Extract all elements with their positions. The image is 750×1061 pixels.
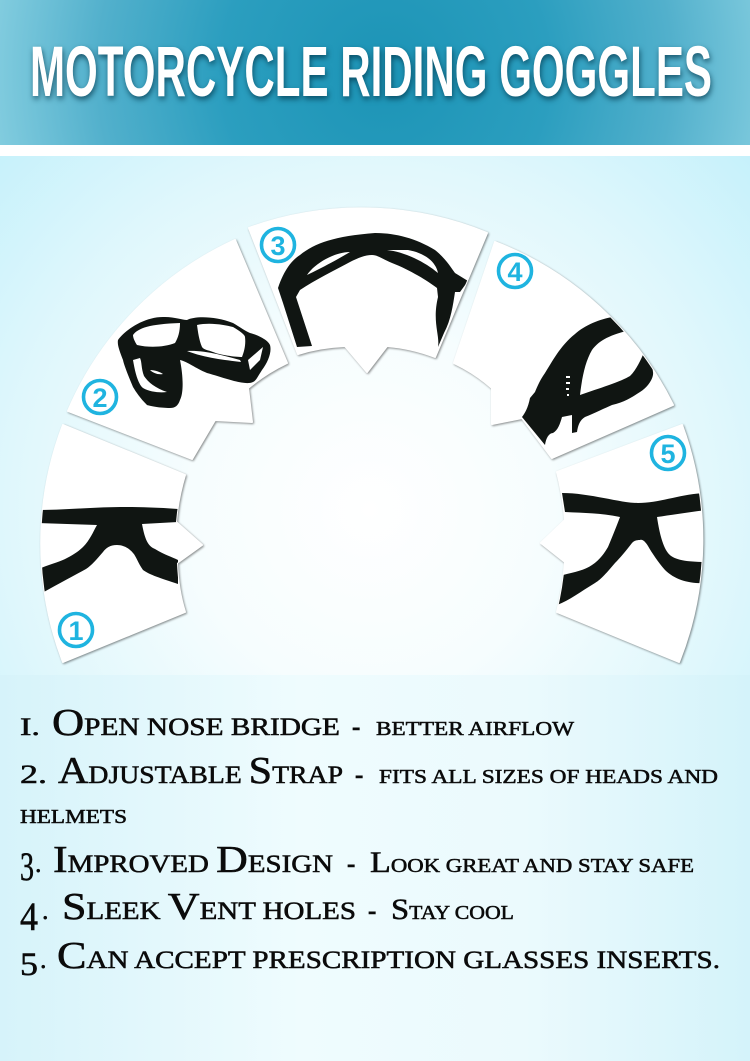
- item 4: sleek vent holes: SLEEK VENT HOLES: [62, 886, 356, 928]
- item 1: open nose bridge: I.: [20, 714, 40, 741]
- icon: number 5: [652, 436, 684, 470]
- goggles: three quarter view with strap: [118, 317, 271, 408]
- item 1: open nose bridge: -: [352, 714, 360, 741]
- feature list: [20, 702, 720, 983]
- panel: wedge 3 improved design: [249, 208, 487, 372]
- item 4: sleek vent holes: -: [368, 898, 376, 925]
- item 2: adjustable strap: -: [355, 762, 363, 789]
- icon: number 3: [262, 228, 294, 262]
- item 4: sleek vent holes: .: [42, 896, 48, 925]
- icon: number 2: 2: [92, 383, 108, 413]
- goggles: top view with strap: [278, 233, 468, 347]
- item 2: adjustable strap: [20, 750, 718, 828]
- item 3: improved design: [20, 839, 694, 889]
- item 5: prescription inserts: CAN ACCEPT PRESCRIPTION GLASSES INSERTS.: [57, 935, 720, 977]
- item 1: open nose bridge: OPEN NOSE BRIDGE: [52, 702, 340, 744]
- header band: [0, 0, 750, 156]
- icon: number 5: 5: [660, 439, 676, 469]
- wedge 5 shape: [541, 425, 702, 662]
- wedge 3 shape: [249, 208, 487, 372]
- panel: wedge 1 open nose bridge: [36, 425, 202, 662]
- lower text panel background: [0, 675, 750, 1061]
- goggles: front view with insert: [557, 493, 706, 605]
- wedge 2 shape: [68, 240, 287, 459]
- icon: number 4: [498, 254, 532, 288]
- item 3: improved design: LOOK GREAT AND STAY SAFE: [370, 846, 694, 879]
- goggles: side view with vent holes: [522, 317, 653, 445]
- vent holes: [566, 376, 570, 396]
- item 4: sleek vent holes: STAY COOL: [391, 893, 514, 926]
- item 1: open nose bridge: [20, 702, 574, 744]
- icon: number 1: 1: [68, 616, 84, 646]
- item 4: sleek vent holes: 4: [20, 894, 38, 939]
- item 3: improved design: .: [35, 849, 42, 878]
- goggles: nose bridge front view: [36, 507, 178, 593]
- icon: number 1: [60, 614, 92, 646]
- panel: wedge 5 prescription inserts: [541, 425, 706, 662]
- icon: number 4: 4: [507, 257, 523, 287]
- panel: wedge 2 adjustable strap: [68, 240, 287, 459]
- item 4: sleek vent holes: [20, 886, 514, 939]
- item 5: prescription inserts: 5: [20, 947, 38, 983]
- item 3: improved design: IMPROVED DESIGN: [53, 839, 333, 881]
- item 3: improved design: 3: [20, 844, 34, 889]
- item 2: adjustable strap: FITS ALL SIZES OF HEADS AND: [379, 766, 718, 788]
- wedge 4 shape: [454, 242, 673, 458]
- item 5: prescription inserts: .: [40, 945, 46, 974]
- item 1: open nose bridge: BETTER AIRFLOW: [376, 718, 574, 740]
- item 3: improved design: -: [347, 851, 355, 878]
- icon: number 3: 3: [270, 231, 286, 261]
- item 2: adjustable strap: 2.: [20, 760, 47, 789]
- icon: number 2: [84, 380, 116, 414]
- item 2: adjustable strap: ADJUSTABLE STRAP: [58, 750, 343, 792]
- panel: wedge 4 sleek vent holes: [454, 242, 673, 458]
- item 2: adjustable strap: HELMETS: [20, 806, 127, 828]
- wedge 1 shape: [41, 425, 202, 662]
